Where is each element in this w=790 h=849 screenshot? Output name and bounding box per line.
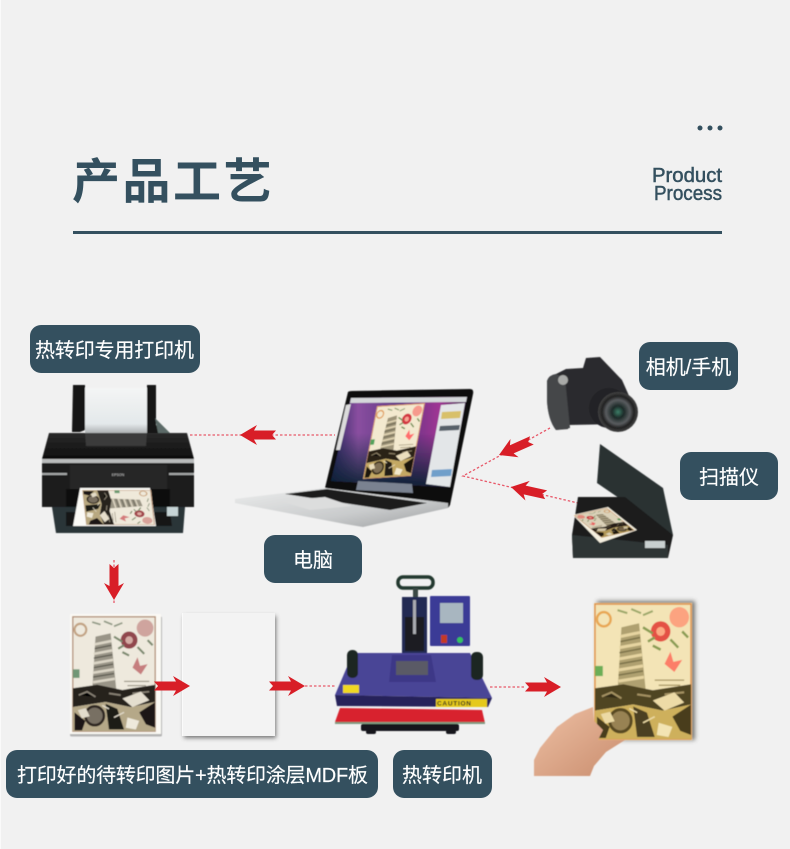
label: camera / phone: 相机/手机: [646, 356, 731, 379]
icon: printer: EPSON: [112, 473, 125, 477]
arrow: computer to printer: [240, 425, 276, 445]
label: computer: [264, 535, 362, 583]
subtitle: Product Process: Process: [654, 183, 722, 205]
subtitle: Product Process: [652, 165, 722, 205]
label: scanner: [680, 452, 778, 500]
label: printer: [30, 325, 200, 373]
label: scanner: 扫描仪: [699, 466, 759, 489]
title: 产品工艺: [72, 156, 274, 209]
icon: printer: [42, 385, 194, 533]
icon: heat press: [335, 577, 492, 734]
label: heat press: [393, 750, 492, 798]
arrow: printer to printed image: [104, 564, 124, 600]
arrow: image to board: [154, 676, 190, 696]
arrow: heat press to finished product: [525, 677, 561, 697]
subtitle: Product Process: Product: [652, 165, 722, 187]
label: camera / phone: [639, 342, 738, 390]
icon: scanner: [572, 444, 673, 558]
three dots: [698, 126, 722, 130]
icon: camera: [547, 357, 638, 432]
label: printer: 热转印专用打印机: [35, 339, 194, 362]
printed transfer image: [70, 614, 162, 736]
label: heat press: 热转印机: [402, 764, 482, 787]
dotted connector lines: [114, 428, 578, 687]
heading underline: [73, 231, 722, 234]
blank coated MDF board: [182, 613, 276, 738]
arrow: camera to computer: [495, 431, 536, 464]
icon: laptop: [235, 389, 473, 527]
label: computer: 电脑: [293, 549, 333, 572]
icon: heat press: CAUTION: [437, 700, 471, 708]
label: printed image and MDF board: 打印好的待转印图片+热转印涂层MDF板: [17, 764, 368, 787]
label: printed image and MDF board: [6, 750, 378, 798]
finished product in hand: [534, 601, 695, 776]
arrow: board to heat press: [269, 676, 305, 696]
arrow: scanner to computer: [509, 477, 548, 505]
